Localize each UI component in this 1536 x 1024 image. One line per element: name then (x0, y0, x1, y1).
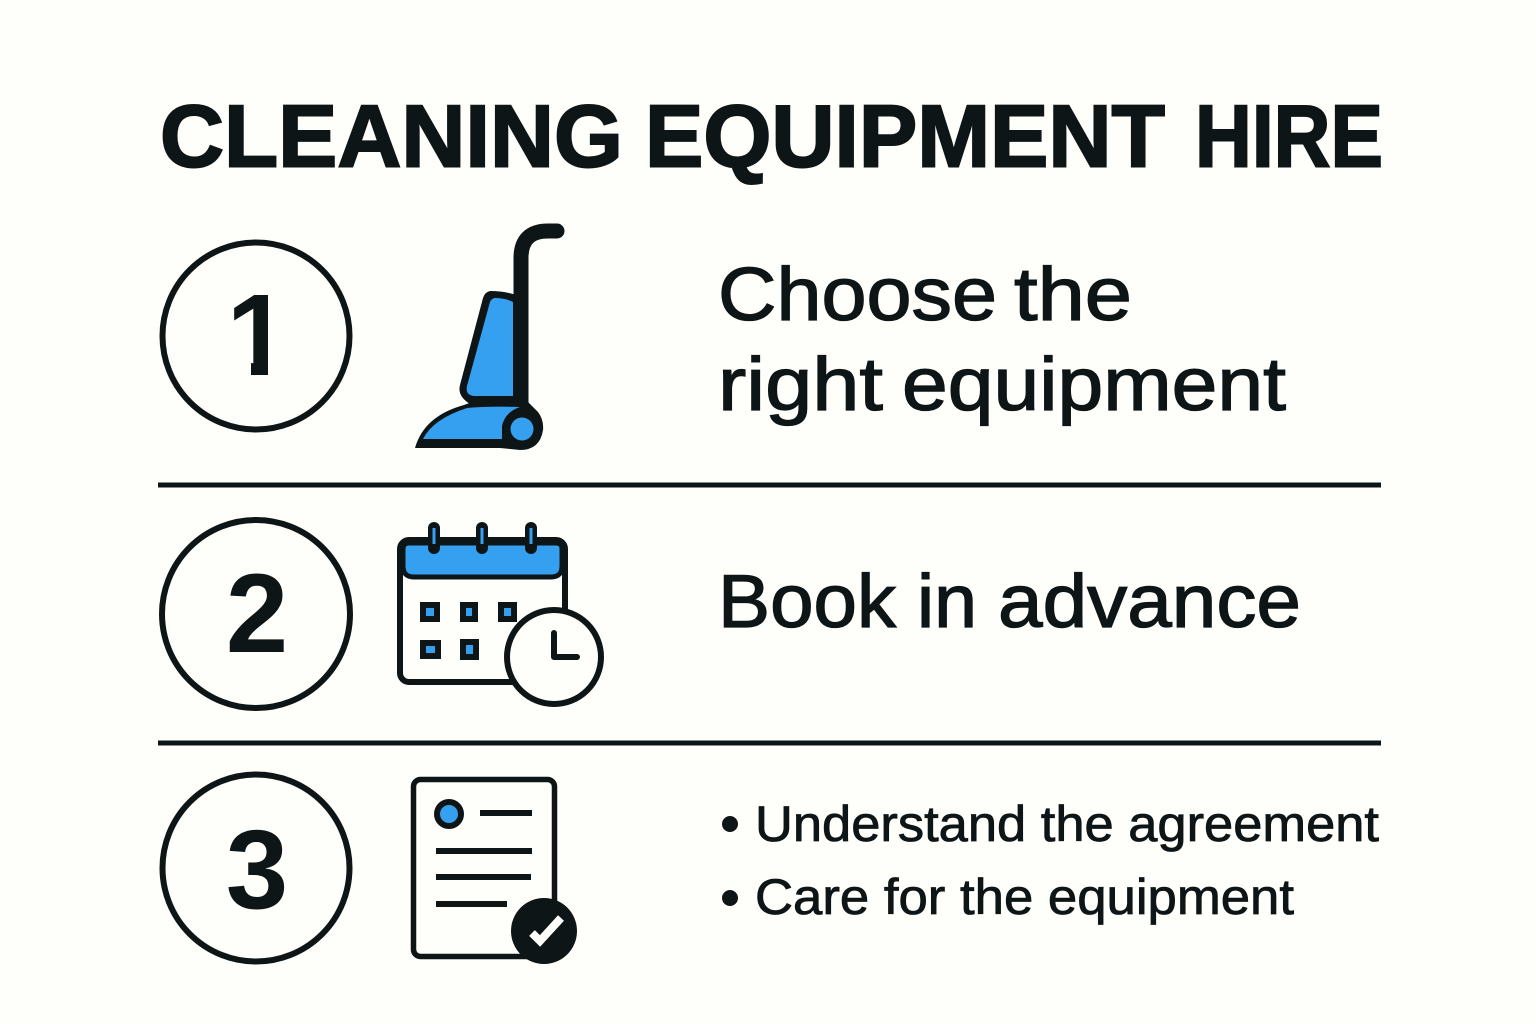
title (160, 86, 1383, 186)
number badge 3 (162, 774, 350, 962)
step 2 text: in (917, 559, 977, 643)
number badge 2: 2 (226, 551, 288, 676)
step 3 bullet list (722, 796, 1379, 925)
step 2 text: advance (998, 559, 1301, 643)
number badge 1: 1 (226, 270, 291, 400)
step 1 (162, 231, 1286, 450)
step 2 (162, 520, 1301, 708)
step 3 bullet list: Care for the equipment (755, 869, 1294, 925)
step 3 bullet list: Understand the agreement (755, 796, 1379, 852)
step 1 text: right (718, 342, 883, 426)
step 1 text: equipment (902, 342, 1286, 426)
number badge 1 (162, 242, 350, 430)
title: HIRE (1195, 86, 1383, 186)
step 1 text (718, 252, 1286, 426)
number badge 3: 3 (226, 807, 288, 932)
title: CLEANING (160, 86, 623, 186)
step 3 (162, 774, 1379, 964)
step 2 text: Book (718, 559, 897, 643)
icon: vacuum cleaner (415, 231, 557, 450)
step 1 text: Choose (718, 252, 997, 336)
step 1 text: the (1014, 252, 1132, 336)
icon: calendar with clock (400, 528, 601, 704)
icon: agreement document (414, 780, 577, 964)
number badge 2 (162, 520, 350, 708)
step 2 text (718, 559, 1301, 643)
title: EQUIPMENT (645, 86, 1165, 186)
